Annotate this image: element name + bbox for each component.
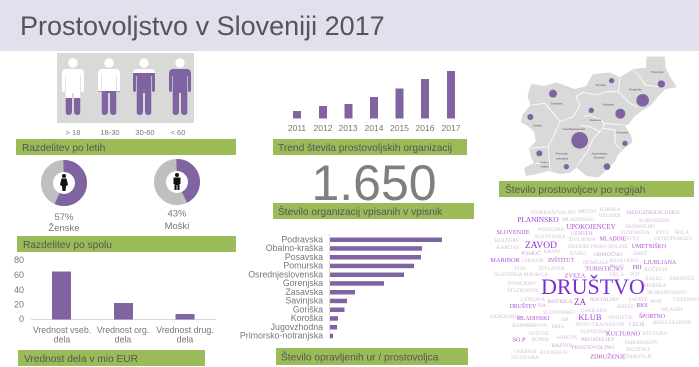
word cloud: IZOBRAŽEVALNO [531,208,575,216]
word cloud: PODJETJE [609,315,633,321]
word cloud: CELJE [629,322,646,328]
word cloud: ZA [574,297,586,307]
region labels: Osrednjeslovenska [562,127,585,131]
word cloud: LENDAVA [521,297,545,303]
region labels: Goriška [533,124,542,128]
word cloud: ŠTUDENTOV [507,286,539,294]
word cloud: ASSOCIAZIONE [653,320,691,326]
big number: 1.650 [311,155,437,211]
word cloud: DRUŠTVO [541,274,645,299]
word cloud: RKS [636,303,648,309]
word cloud: INŠTITUT [548,256,574,264]
donut: women [47,166,81,234]
word cloud: SOCIALNO [590,297,618,303]
word cloud: MESTO [578,209,596,215]
word cloud: RAZVOJ [551,343,573,349]
word cloud: GASILSKO [581,308,607,314]
word cloud: POSTOJNA [538,227,564,233]
heading: Trend [273,139,467,155]
word cloud: VELENJE [599,213,621,219]
word cloud: UMETNIŠKO [632,242,666,250]
bar chart: hours per volunteer: Goriška [293,304,323,314]
word cloud: DOMŽALE [583,258,609,266]
word cloud: KOROŠKEM [639,216,669,224]
word cloud: BISTRICA [547,299,573,305]
bar chart: trend of organisations: 2012 [314,123,333,133]
word cloud: ŽIVALI [570,249,587,257]
word cloud: SO.P [512,336,526,344]
bar chart: value of work: Vrednost org. [97,325,149,335]
region bubbles [527,78,665,170]
word cloud: OR [561,317,569,323]
bar chart: value of work: dela [115,334,131,344]
region labels: Gorenjska [550,101,563,105]
word cloud: KULTURNO [606,330,640,338]
word cloud: CENTER [571,231,593,237]
region labels: Jugovzhodna [591,152,608,156]
word cloud: VITA [514,266,526,272]
word cloud: ŽIVLJENJA [568,235,596,243]
heading: Razdelitev po spolu: Razdelitev po spolu [23,240,112,251]
word cloud: FUNDACIJA [620,230,650,236]
word cloud: PROMOCIJO [625,224,655,230]
word cloud: HIŠA [552,322,564,330]
word cloud: ŠPORTNO [639,312,665,320]
word cloud: KAMNIK [512,323,534,329]
region labels: Posavska [617,130,629,134]
word cloud: TURISTIČNO [585,264,623,272]
region labels: Obalno- [540,161,550,165]
bar chart: trend of organisations: 2017 [442,123,461,133]
word cloud: SAVATE [629,297,647,303]
word cloud: ZVEZA [565,272,586,280]
word cloud: UPOKOJENCEV [566,224,616,231]
word cloud: ILIRSKA [600,207,621,213]
bar chart: hours per volunteer: Savinjska [285,296,323,306]
word cloud: PROSTOVOLJNO [572,345,614,351]
bar chart: value of work: 40 [14,285,24,295]
women label: Ženske [48,223,80,234]
bar chart: hours per volunteer: Jugovzhodna [271,322,323,332]
age labels: < 60 [171,128,185,137]
heading: Vrednost dela v mio EUR: Vrednost dela v mio EUR [24,354,138,365]
word cloud: ŠOLA [675,228,689,236]
word cloud: MARIBOR [490,257,520,264]
word cloud: SLOVENSKO [543,310,575,316]
word cloud: LJUBLJANA [644,260,677,266]
word cloud: SLOVENSKI [580,329,610,335]
word cloud: ZDRUŽENJE [590,352,626,360]
word cloud: MLADINE [600,236,627,242]
age labels: 18-30 [100,128,120,137]
region labels: Pomurska [651,70,664,74]
word cloud: ŽALEC [645,274,663,282]
word cloud: EKOLOŠKO [610,256,638,264]
word cloud: SREDIŠČE [669,274,695,282]
bar chart: trend of organisations: 2011 [288,123,306,133]
word cloud: ROD [650,299,662,305]
word cloud: PTUJ [656,230,668,236]
bar chart: hours per volunteer [240,234,442,341]
word cloud: MEDGENERACIJSKO [626,210,680,216]
age labels [66,128,185,137]
word cloud [490,207,699,361]
icon: woman [60,174,68,191]
region labels: Primorsko- [556,152,569,156]
word cloud: NOVO TRAJNOSTNI [576,322,625,328]
heading: Število organizacij: Število organizacij vpisanih v vpisnik [278,205,443,218]
bar chart: hours per volunteer: Obalno-kraška [266,243,323,253]
region labels: Slovenija [594,155,605,159]
header band [0,0,699,51]
bar chart: hours per volunteer: Podravska [281,234,323,244]
word cloud: AKADEMIJA [490,314,521,320]
word cloud: DRUŠTEV [510,302,537,310]
bar chart: value of work: 20 [14,300,24,310]
icon: figure 18-30 [98,58,120,115]
heading: Razdelitev po letih [16,139,236,155]
heading: Razdelitev po spolu [17,236,236,252]
word cloud: SVET [626,236,640,242]
word cloud: MEDOBČINSKO DOLINE [568,242,628,250]
region labels: Zasavska [590,118,602,122]
word cloud: GIBANJE [522,258,544,264]
word cloud: KOPER [531,337,549,343]
word cloud: OSEBAM [514,349,536,355]
bar chart: hours per volunteer: Pomurska [283,261,323,271]
heading: Razdelitev po letih: Razdelitev po letih [22,143,105,154]
word cloud: MLADINSKO [562,217,594,223]
icon: figure over 60 [169,58,191,115]
heading: Število organizacij [273,203,474,219]
word cloud: INVALIDOV [507,281,537,287]
word cloud: PRI [632,265,642,271]
bar chart: hours per volunteer: Primorsko-notranjska [240,331,323,341]
heading: Število prostovoljcev po regijah: Število prostovoljcev po regijah [505,183,645,196]
bar chart: hours per volunteer: Osrednjeslovenska [248,270,323,280]
word cloud: IZGOVORA [511,355,539,361]
women label [48,212,80,234]
donut: men [160,165,194,232]
word cloud: PROTI [609,264,625,270]
bar chart: hours per volunteer: Zasavska [285,287,323,297]
title: Prostovoljstvo v Sloveniji 2017 [20,11,385,41]
bar chart: trend of organisations: 2016 [416,123,435,133]
word cloud: NOVA [533,323,547,329]
word cloud: KARITAS [497,245,519,251]
bar chart: value of work: dela [54,334,70,344]
word cloud: RDEČI [617,302,633,310]
men label: Moški [165,221,189,232]
icon: man [174,173,180,190]
bar chart: value of work: 60 [14,270,24,280]
age labels: > 18 [66,128,80,137]
word cloud: KOČEVJE [644,265,668,273]
word cloud: SLOVENIJE [496,229,530,236]
word cloud: ZAVOD [525,241,557,251]
word cloud: NA [538,303,546,309]
word cloud: BELTINCI [626,347,650,353]
word cloud: ŽIVLJENJE [539,264,565,272]
region labels: Koroška [596,83,606,87]
heading: Število opravljenih ur [276,348,468,365]
icon: figure 30-60 [133,58,155,115]
map of Slovenia [522,57,676,177]
panel: age distribution [57,53,194,137]
word cloud: SLOVENIJA MAVRICA [494,272,548,278]
bar chart: value of work: dela [177,334,193,344]
word cloud: HUMANITARNO [647,290,687,296]
icon: figure under 18 [62,58,84,115]
region labels: Savinjska [603,103,615,107]
bar chart: value of work: Vrednost drug. [156,325,214,335]
bar chart: value of work [14,255,216,344]
word cloud: SLOVENSKA [534,234,566,240]
word cloud: KRANJ [543,249,561,255]
word cloud: SOBOTA [557,335,578,341]
bar chart: hours per volunteer: Koroška [291,313,323,323]
word cloud: PRIJATELJEV [581,337,615,343]
heading: Število prostovoljcev po regijah [499,181,694,197]
word cloud: OSTEOPOROZO [654,236,692,242]
word cloud: OBMOČNO [594,250,622,258]
bar chart: hours per volunteer: Gorenjska [283,278,323,288]
men label [165,208,189,232]
bar chart: trend of organisations: 2015 [390,123,409,133]
word cloud: KLUB [578,312,602,322]
word cloud: BOLNIKOV [540,350,568,356]
word cloud: DELA [610,272,624,278]
bar chart: value of work: Vrednost vseb. [33,325,91,335]
word cloud: BREŽ [633,249,647,257]
word cloud: TABORNIKOV [624,340,658,346]
bar chart: trend of organisations: 2014 [365,123,384,133]
bar chart: hours per volunteer: Posavska [285,252,323,262]
word cloud: SOŽITJE [529,329,549,337]
word cloud: POMOČ [521,249,541,257]
women label: 57% [54,212,74,223]
bar chart: trend of organisations [288,71,461,133]
bar chart: value of work: 0 [19,314,24,324]
word cloud: MLADINSKI [517,316,549,322]
word cloud: TRBOVLJE [626,354,652,360]
bar chart: value of work: 80 [14,255,24,265]
heading: Trend: Trend števila prostovoljskih organizacij [278,143,452,154]
bar chart: trend of organisations: 2013 [339,123,358,133]
age labels: 30-60 [135,128,155,137]
word cloud: MLADIH [661,307,683,313]
region labels: kraška [541,165,549,169]
word cloud: POT [630,272,641,278]
word cloud: MURSKA [644,283,667,289]
region labels [533,70,664,169]
word cloud: KULTURO [643,331,668,337]
men label: 43% [167,208,187,220]
region labels: Podravska [629,88,642,92]
heading: Število opravljenih ur: Število opravljenih ur / prostovoljca [281,350,439,364]
word cloud: PLANINSKO [517,215,559,224]
heading: Vrednost dela v mio EUR [18,350,205,366]
region labels: notranjska [556,156,569,160]
word cloud: KULTURE [495,238,519,244]
